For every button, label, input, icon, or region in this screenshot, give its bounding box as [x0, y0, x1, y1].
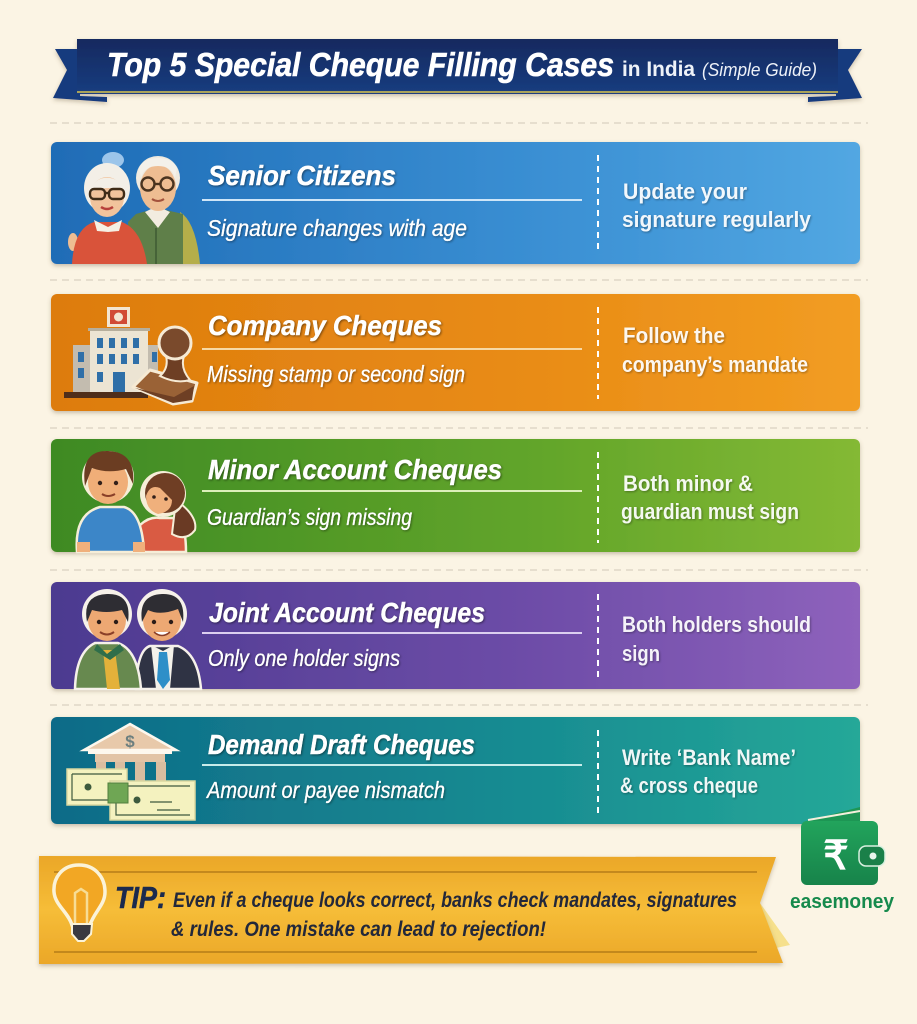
solution text — [620, 745, 796, 798]
solution text: Write ‘Bank Name’ — [622, 745, 796, 770]
problem text: Amount or payee nismatch — [205, 777, 445, 803]
heading: senior citizens: Senior Citizens — [208, 160, 396, 191]
icon: elderly couple — [68, 152, 200, 264]
icon: bank with cheques — [67, 724, 195, 820]
problem text: Only one holder signs — [208, 645, 400, 671]
tip text: & rules. One mistake can lead to rejection! — [171, 918, 546, 941]
heading: joint account cheques: Joint Account Cheques — [209, 597, 485, 628]
solution text — [621, 471, 799, 524]
icon: bank with cheques: $ — [125, 732, 135, 751]
problem text: Missing stamp or second sign — [207, 361, 465, 387]
solution text: Both minor & — [623, 471, 753, 496]
logo: easemoney wallet: ₹ — [823, 834, 849, 878]
logo: easemoney wallet — [790, 807, 895, 913]
problem text: Guardian’s sign missing — [207, 504, 412, 530]
solution text: signature regularly — [622, 207, 812, 232]
solution text: Both holders should — [622, 612, 811, 637]
title suffix: (Simple Guide) — [702, 60, 817, 80]
icon: two account holders — [75, 589, 201, 689]
icon: office building and stamp — [64, 307, 197, 404]
solution text: company’s mandate — [622, 352, 808, 377]
solution text: Follow the — [623, 323, 725, 348]
problem text: Signature changes with age — [207, 215, 467, 241]
panel: senior citizens — [51, 142, 860, 264]
solution text — [622, 612, 811, 666]
solution text: & cross cheque — [620, 773, 758, 798]
title suffix — [622, 58, 817, 81]
logo: easemoney wallet: easemoney — [790, 891, 895, 913]
panel: company cheques — [51, 294, 860, 411]
tip label: TIP: — [115, 880, 166, 915]
title banner — [53, 39, 862, 102]
icon: light bulb — [54, 865, 105, 941]
tip text — [171, 889, 737, 941]
solution text: guardian must sign — [621, 499, 799, 524]
panel: minor account cheques — [51, 439, 860, 552]
icon: boy and girl — [77, 451, 195, 552]
solution text — [622, 179, 812, 232]
heading: demand draft cheques: Demand Draft Cheques — [208, 729, 475, 760]
panel: joint account cheques — [51, 582, 860, 689]
panel: tip banner — [39, 856, 790, 964]
solution text: sign — [622, 641, 660, 666]
title text: Top 5 Special Cheque Filling Cases — [107, 46, 614, 83]
solution text: Update your — [623, 179, 747, 204]
solution text — [622, 323, 808, 377]
tip text: Even if a cheque looks correct, banks check mandates, signatures — [173, 889, 737, 912]
heading: minor account cheques: Minor Account Cheques — [208, 454, 502, 485]
title suffix: in India — [622, 58, 695, 81]
panel: demand draft cheques — [51, 717, 860, 824]
heading: company cheques: Company Cheques — [208, 310, 442, 341]
